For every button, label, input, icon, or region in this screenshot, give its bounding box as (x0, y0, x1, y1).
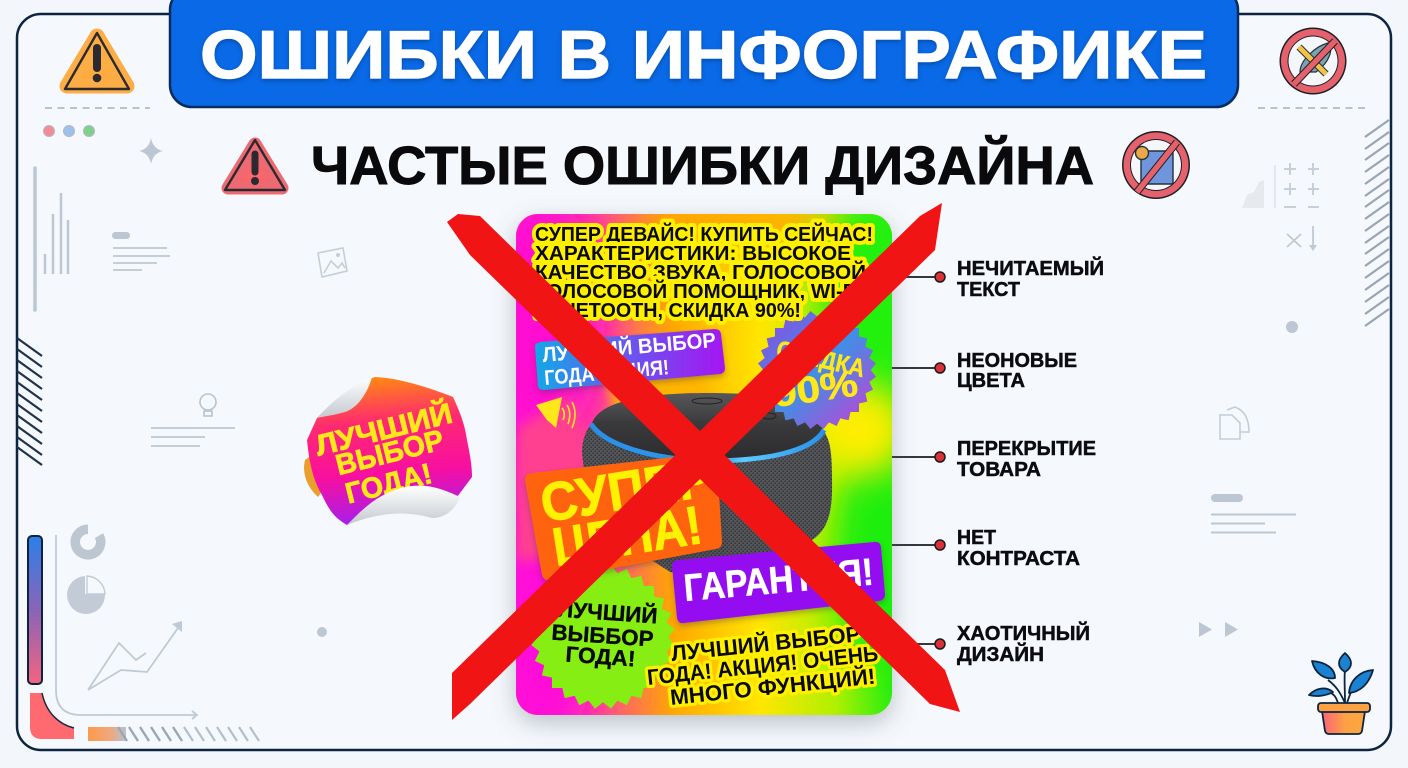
sticker text (312, 396, 456, 510)
bottom text block: ГОДА! АКЦИЯ! ОЧЕНЬ (646, 641, 879, 690)
poster card (504, 210, 904, 736)
card background (516, 214, 892, 715)
top text block: КАЧЕСТВО ЗВУКА, ГОЛОСОВОЙ (535, 260, 866, 284)
sticker text: ВЫБОР (333, 424, 447, 482)
badge: guarantee: ГАРАНТИЯ! (682, 552, 875, 610)
bottom text block: МНОГО ФУНКЦИЙ! (669, 664, 876, 710)
badge: best choice (535, 328, 725, 390)
top text block: СУПЕР ДЕВАЙС! КУПИТЬ СЕЙЧАС! (535, 222, 873, 246)
callout: chaotic design (885, 621, 1090, 666)
badge: super price: СУПЕР (536, 448, 716, 534)
title banner (170, 0, 1238, 107)
top text block: ХАРАКТЕРИСТИКИ: ВЫСОКОЕ (535, 243, 851, 265)
sticker text: ЛУЧШИЙ (312, 396, 456, 463)
starburst: discount (758, 311, 876, 429)
callout: chaotic design: ДИЗАЙН (957, 642, 1044, 666)
top text block: ГОЛОСОВОЙ ПОМОЩНИК, WI-FI (535, 279, 861, 303)
icon: potted plant (1309, 653, 1373, 734)
sticker text: ГОДА! (342, 458, 435, 510)
right decorations (1199, 108, 1389, 637)
callout: unreadable text: ТЕКСТ (957, 278, 1020, 301)
subtitle row (225, 131, 1190, 199)
starburst: best choice: ЛУЧШИЙ (557, 597, 658, 628)
left decorations (17, 108, 347, 637)
bottom-left decorations (28, 529, 259, 741)
sticker curl top (317, 377, 372, 418)
callout: neon colors: НЕОНОВЫЕ (957, 349, 1077, 372)
starburst: discount: СКИДКА (774, 336, 868, 383)
callout: no contrast (892, 526, 1080, 570)
bottom text block (646, 621, 879, 710)
starburst: discount: 90% (770, 362, 860, 415)
callout: neon colors (892, 349, 1077, 392)
icon: crossed-out image (1122, 131, 1190, 199)
big red X (447, 203, 960, 720)
sticker: best choice of the year (304, 377, 472, 525)
bottom text block: ЛУЧШИЙ ВЫБОР (670, 621, 861, 666)
callout: neon colors: ЦВЕТА (957, 369, 1025, 392)
callout: no contrast: НЕТ (957, 526, 996, 549)
badge: guarantee (672, 542, 885, 623)
callout: chaotic design: ХАОТИЧНЫЙ (957, 621, 1090, 645)
callout: product overlap (892, 437, 1096, 481)
badge: best choice: ГОДА АКЦИЯ! (543, 356, 670, 390)
badge: super price: ЦЕНА! (548, 495, 706, 578)
sticker curl bottom (347, 486, 460, 525)
callouts (880, 256, 1104, 666)
speaker icon (536, 397, 575, 428)
callout: product overlap: ПЕРЕКРЫТИЕ (957, 437, 1096, 460)
icon: orange warning triangle (65, 33, 129, 89)
subtitle text: ЧАСТЫЕ ОШИБКИ ДИЗАЙНА (311, 135, 1094, 196)
icon: crossed-out tools (1280, 28, 1346, 94)
badge: best choice: ЛУЧШИЙ ВЫБОР (541, 328, 717, 367)
callout: no contrast: КОНТРАСТА (957, 547, 1080, 570)
title text: ОШИБКИ В ИНФОГРАФИКЕ (200, 17, 1207, 93)
starburst: best choice: ВЫББОР (551, 619, 654, 652)
callout: product overlap: ТОВАРА (957, 458, 1041, 481)
badge: super price (525, 448, 722, 580)
top text block (535, 222, 873, 322)
starburst: best choice: ГОДА! (565, 642, 636, 671)
speaker (582, 393, 832, 573)
callout: unreadable text (880, 256, 1104, 301)
callout: unreadable text: НЕЧИТАЕМЫЙ (957, 256, 1104, 280)
top text block: BLUETOOTH, СКИДКА 90%! (535, 300, 801, 322)
starburst: best choice (531, 568, 675, 709)
icon: red warning triangle (225, 140, 285, 190)
